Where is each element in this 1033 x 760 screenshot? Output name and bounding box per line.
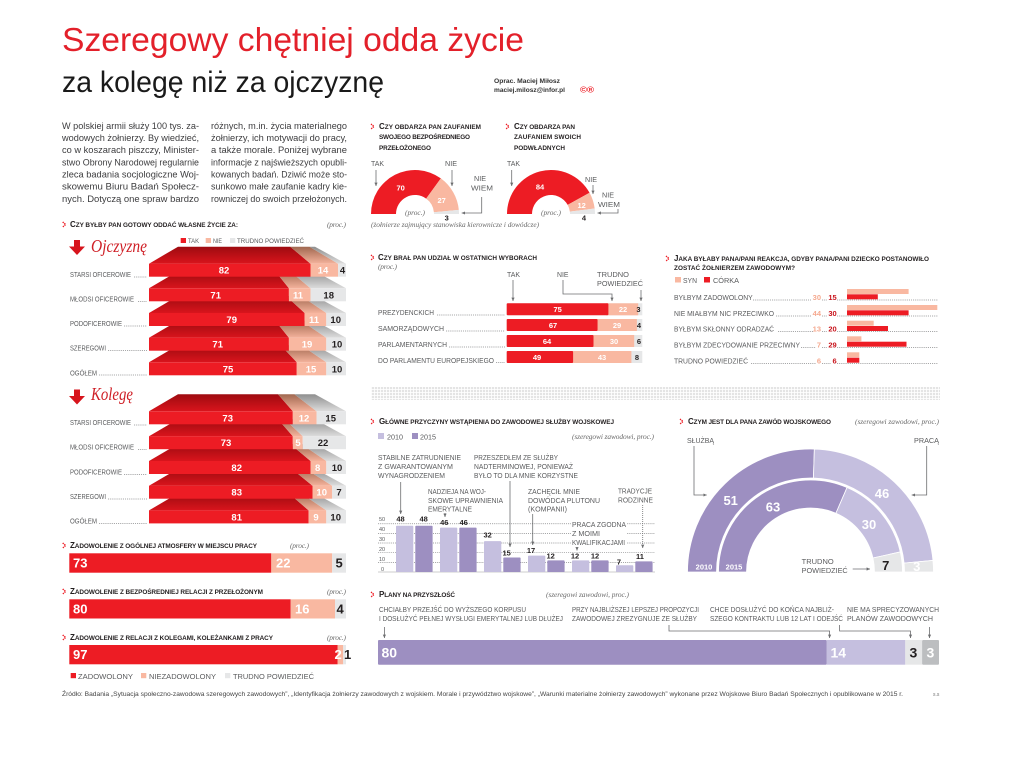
panel: satisfaction (63, 541, 351, 681)
values: 12 (591, 552, 599, 560)
values: 48 (420, 514, 428, 524)
chart: superior: (proc.) (327, 587, 347, 596)
annotations: plans: NIE MA SPRECYZOWANYCH (847, 607, 939, 614)
row: szeregowi: 83 (231, 488, 242, 499)
intro text (61, 121, 347, 205)
chart: reasons bars (378, 514, 655, 573)
chart: plans bar: 80 (382, 644, 397, 660)
annotations: plans: CHCIAŁBY PRZEJŚĆ DO WYŻSZEGO KORPUSU (379, 605, 526, 614)
chart: colleagues: ZADOWOLENIE Z RELACJI Z KOLEGAMI, KOLEŻANKAMI Z PRACY (70, 633, 274, 642)
axis labels: 30 (379, 537, 385, 543)
row: trudno: TRUDNO POWIEDZIEĆ (674, 356, 748, 366)
row: starsi oficerowie: 12 (299, 413, 309, 424)
row: podoficerowie: PODOFICEROWIE (70, 321, 122, 328)
row: parliamentary (378, 335, 642, 349)
values: 46 (460, 518, 468, 527)
row: local: 4 (637, 321, 642, 330)
row: szeregowi: 10 (316, 488, 327, 499)
intro text: nych. Dotyczą one spraw bardzo (62, 194, 199, 205)
heading: reasons: GŁÓWNE PRZYCZYNY WSTĄPIENIA DO ZAWODOWEJ SŁUŻBY WOJSKOWEJ (379, 417, 614, 426)
annotation: moved from extended service (474, 453, 578, 547)
annotations: plans: I DOSŁUŻYĆ PEŁNEJ WYSŁUGI EMERYTALNEJ LUB DŁUŻEJ (379, 614, 563, 623)
row: starsi oficerowie: 14 (318, 266, 329, 277)
chart: double semicircle: 7 (882, 558, 889, 573)
row: parliamentary: PARLAMENTARNYCH (378, 342, 447, 349)
row: ogółem: 10 (330, 512, 341, 523)
heading: willingness (63, 220, 347, 229)
intro text: skowemu Biuru Badań Społecz- (62, 182, 199, 192)
annotation: retirement rights: NADZIEJA NA WOJ- (428, 489, 487, 496)
label: pracą (912, 438, 939, 495)
row: odradzać: BYŁBYM SKŁONNY ODRADZAĆ (674, 324, 774, 334)
annotation: family tradition: TRADYCJE (618, 488, 652, 496)
heading: trust in subordinates (506, 122, 581, 152)
heading: elections: (proc.) (378, 262, 398, 271)
chart: Kolegę stacked bars (70, 394, 346, 526)
chart: double semicircle: 2010 (696, 562, 712, 572)
chart: plans bar: 3 (910, 644, 918, 660)
row: młodsi oficerowie: 22 (318, 438, 328, 449)
labels: superior: NIE (445, 161, 457, 168)
values: 12 (547, 552, 555, 560)
annotation: qualifications: Z MOIMI (572, 531, 600, 538)
heading: Kolegę: Kolegę (90, 384, 133, 404)
label: służbą (687, 436, 714, 495)
chart: atmosphere: (proc.) (290, 541, 310, 550)
row: parliamentary: 6 (637, 337, 641, 346)
row: european (378, 351, 642, 365)
row: trudno (674, 352, 938, 366)
labels: superior: WIEM (471, 186, 493, 192)
row: presidential (378, 303, 642, 317)
chart: atmosphere (63, 541, 346, 573)
panel: what military profession is (680, 417, 940, 575)
chart: atmosphere: 5 (336, 556, 343, 570)
axis labels: 10 (379, 557, 385, 563)
label: trudno powiedzieć (802, 559, 870, 575)
row: ogółem: OGÓŁEM (70, 368, 97, 378)
row: przeciwny (674, 336, 938, 350)
note: respondents: (żołnierze zajmujący stanowiska kierownicze i dowódcze) (371, 220, 540, 229)
row: podoficerowie: 10 (330, 315, 341, 326)
row: trudno: 6 (833, 356, 837, 366)
panel: elections (371, 253, 643, 365)
axis labels: 20 (379, 547, 385, 553)
chart: double semicircle (688, 449, 934, 574)
row: ogółem: 15 (306, 364, 317, 376)
intro text: co w koszarach piszczy, Minister- (62, 145, 199, 156)
row: presidential: 3 (636, 305, 641, 314)
panel: trust in subordinates (506, 122, 620, 222)
legend: tak nie trudno: TRUDNO POWIEDZIEĆ (237, 236, 304, 245)
labels: subordinates (507, 161, 620, 213)
row: podoficerowie (70, 296, 346, 328)
heading: willingness: (proc.) (327, 220, 347, 229)
label: pracą: PRACĄ (914, 438, 939, 445)
row: ogółem: 75 (223, 364, 234, 376)
label: trudno powiedzieć: TRUDNO (802, 559, 834, 566)
chart: Ojczyznę stacked bars (70, 247, 346, 378)
heading: plans (371, 590, 630, 599)
row: młodsi oficerowie: 18 (323, 290, 334, 301)
chart: plans bar: 14 (830, 644, 846, 660)
row: european: DO PARLAMENTU EUROPEJSKIEGO (378, 358, 495, 365)
legend: years: 2015 (420, 434, 436, 442)
labels: subordinates: NIE (585, 177, 597, 184)
row: european: 8 (635, 353, 639, 362)
title: Szeregowy chętniej odda życie (62, 21, 524, 58)
labels: superior: NIE (474, 176, 486, 183)
row: podoficerowie: 10 (332, 463, 342, 474)
annotation: moved from extended service: NADTERMINOWEJ, PONIEWAŻ (474, 462, 574, 471)
row: starsi oficerowie: 15 (325, 413, 337, 424)
labels: subordinates: TAK (507, 161, 520, 168)
row: local: SAMORZĄDOWYCH (378, 326, 444, 333)
row: szeregowi: 71 (212, 340, 224, 351)
row: presidential: PREZYDENCKICH (378, 310, 434, 317)
intro text: sunkowo małe zaufanie kadry kie- (211, 182, 347, 192)
row: szeregowi: SZEREGOWI (70, 346, 106, 352)
heading: plans: (szeregowi zawodowi, proc.) (546, 590, 630, 599)
annotations: plans: PRZY NAJBLIŻSZEJ LEPSZEJ PROPOZYCJI (572, 605, 699, 614)
labels: elections columns: TRUDNO (597, 272, 630, 279)
row: młodsi oficerowie (70, 271, 346, 304)
axis labels: 40 (379, 527, 385, 533)
labels: subordinates: WIEM (598, 202, 620, 209)
heading: Kolegę (69, 384, 133, 404)
row: starsi oficerowie: 73 (222, 413, 233, 424)
row: podoficerowie: 82 (231, 463, 242, 474)
row: starsi oficerowie: 4 (340, 266, 346, 277)
row: podoficerowie: 79 (226, 315, 237, 326)
legend: syn córka: CÓRKA (713, 276, 739, 285)
legend: satisfaction: ZADOWOLONY (78, 674, 133, 681)
chart: double semicircle: 63 (766, 500, 780, 514)
chart: colleagues: 1 (344, 647, 351, 662)
legend: tak nie trudno: TAK (188, 238, 200, 245)
title (62, 21, 524, 99)
row: trudno: 6 (817, 356, 821, 366)
legend: satisfaction: TRUDNO POWIEDZIEĆ (233, 672, 314, 681)
annotations: plans (379, 605, 939, 638)
row: podoficerowie: 11 (309, 315, 320, 326)
row: przeciwny: 7 (817, 340, 821, 350)
row: local: 67 (549, 321, 557, 330)
chart: double semicircle: 2015 (726, 562, 742, 572)
row: parliamentary: 30 (610, 337, 618, 346)
label: trudno powiedzieć: POWIEDZIEĆ (802, 566, 848, 575)
heading: trust in subordinates: CZY OBDARZA PAN (514, 122, 575, 131)
intro text: różnych, m.in. życia materialnego (211, 121, 347, 132)
values: 12 (571, 552, 579, 560)
annotation: retirement rights (428, 489, 503, 517)
intro text: kowanych badań. Dziwić może sto- (211, 170, 347, 180)
row: starsi oficerowie (70, 247, 346, 279)
heading: trust in superior: SWOJEGO BEZPOŚREDNIEGO (379, 132, 470, 141)
heading: profession: (szeregowi zawodowi, proc.) (855, 417, 940, 426)
legend: syn córka: SYN (683, 278, 697, 285)
heading: willingness: CZY BYŁBY PAN GOTOWY ODDAĆ WŁASNE ŻYCIE ZA: (70, 220, 238, 229)
row: starsi oficerowie (70, 394, 346, 427)
chart: colleagues (63, 633, 351, 664)
row: młodsi oficerowie: 11 (293, 290, 304, 301)
panel: willingness to give life (63, 220, 347, 526)
values: 32 (484, 530, 492, 540)
title: za kolegę niż za ojczyznę (62, 66, 384, 99)
values: 48 (396, 514, 405, 524)
intro text: stwo Obrony Narodowej regularnie (62, 158, 199, 168)
chart: atmosphere: 22 (276, 556, 290, 570)
row: szeregowi (70, 321, 346, 352)
intro text: rowniczej do swoich przełożonych. (211, 194, 347, 205)
row: ogółem: 81 (231, 512, 243, 523)
annotation: stable employment: Z GWARANTOWANYM (378, 464, 453, 471)
row: szeregowi (70, 469, 346, 501)
chart: elections bars (378, 303, 642, 365)
intro text: a także morale. Poniżej wybrane (211, 145, 347, 156)
annotations: plans: SZEGO KONTRAKTU LUB 12 LAT I ODEJŚĆ (710, 614, 843, 623)
row: european: 49 (533, 353, 541, 362)
row: starsi oficerowie: STARSI OFICEROWIE (70, 272, 131, 279)
heading: profession: CZYM JEST DLA PANA ZAWÓD WOJSKOWEGO (688, 417, 831, 426)
chart: superior: ZADOWOLENIE Z BEZPOŚREDNIEJ RELACJI Z PRZEŁOŻONYM (70, 587, 263, 596)
labels: elections columns: TAK (507, 272, 520, 279)
heading: trust in subordinates: PODWŁADNYCH (514, 145, 565, 152)
row: ogółem: 9 (313, 512, 319, 523)
values: 7 (617, 558, 621, 566)
legend: years: (szeregowi zawodowi, proc.) (572, 432, 655, 441)
intro text: informacje z najświeższych opubli- (211, 158, 347, 168)
annotation: qualifications (571, 520, 627, 550)
row: nie przeciwko: NIE MIAŁBYM NIC PRZECIWKO (674, 311, 775, 318)
row: szeregowi: SZEREGOWI (70, 494, 106, 501)
annotation: moved from extended service: PRZESZEDŁEM ZE SŁUŻBY (474, 453, 558, 462)
chart: colleagues: 2 (334, 647, 342, 662)
heading: plans: PLANY NA PRZYSZŁOŚĆ (379, 590, 455, 599)
chart: atmosphere: ZADOWOLENIE Z OGÓLNEJ ATMOSFERY W MIEJSCU PRACY (70, 541, 258, 550)
legend: years (378, 432, 655, 442)
heading: trust in superior: CZY OBDARZA PAN ZAUFANIEM (379, 122, 481, 131)
annotation: retirement rights: EMERYTALNE (428, 506, 472, 514)
heading: trust in superior: PRZEŁOŻONEGO (379, 143, 431, 152)
annotations: plans: ZAWODOWEJ ZREZYGNUJE ZE SŁUŻBY (572, 614, 697, 623)
row: przeciwny: 29 (828, 340, 837, 350)
chart: superior: 4 (336, 602, 344, 616)
chart: double semicircle: 30 (862, 517, 876, 532)
row: młodsi oficerowie: 5 (295, 438, 301, 449)
chart: semicircle superior: 27 (438, 196, 446, 205)
legend: tak nie trudno: NIE (213, 238, 222, 245)
row: młodsi oficerowie: MŁODSI OFICEROWIE (70, 296, 134, 304)
values: 17 (527, 546, 535, 555)
row: młodsi oficerowie (70, 419, 346, 452)
row: presidential: 75 (554, 305, 562, 314)
annotation: platoon commander: (KOMPANII) (528, 506, 567, 514)
chart: semicircle subordinates: 4 (582, 214, 587, 222)
panel: reasons for joining (371, 417, 655, 573)
chart: semicircle superior (371, 170, 459, 222)
annotation: qualifications: PRACA ZGODNA (572, 522, 626, 529)
chart: double semicircle: 51 (723, 493, 738, 508)
labels: elections columns: NIE (557, 272, 569, 279)
row: ogółem: OGÓŁEM (70, 516, 97, 526)
page mark: s.s (933, 692, 940, 698)
row: zadowolony: 30 (813, 293, 821, 302)
annotation: stable employment: STABILNE ZATRUDNIENIE (378, 455, 461, 462)
values (396, 514, 644, 566)
source note: Źródło: Badania „Sytuacja społeczno-zawodowa szeregowych zawodowych”, „Identyfikacja żołnierzy zawodowych z wojskiem. Morale i przywództwo wojskowe”, „Warunki materialne żołnierzy zawodowych” wykonane przez Wojskowe Biuro Badań Społecznych i opublikowane w 2015 r. (62, 691, 903, 698)
author credit: maciej.milosz@infor.pl (494, 87, 565, 94)
row: odradzać (674, 321, 938, 334)
row: młodsi oficerowie: MŁODSI OFICEROWIE (70, 444, 134, 452)
panel: child reaction (666, 254, 938, 366)
row: nie przeciwko: 30 (828, 309, 837, 318)
row: local (378, 319, 642, 333)
annotation: platoon commander: DOWÓDCA PLUTONU (528, 496, 600, 505)
intro text: żołnierzy, ich motywacji do pracy, (211, 133, 347, 144)
row: młodsi oficerowie: 73 (221, 438, 231, 449)
row: starsi oficerowie: 82 (219, 266, 229, 277)
annotation: family tradition (618, 488, 653, 548)
chart: plans bar (378, 640, 939, 665)
chart: superior (63, 587, 347, 618)
heading: Ojczyznę (69, 236, 147, 256)
legend: years: 2010 (387, 434, 403, 442)
row: szeregowi: 19 (302, 340, 312, 351)
axis labels: 50 (379, 517, 385, 523)
annotation: family tradition: RODZINNE (618, 498, 653, 504)
heading: child reaction (666, 254, 929, 272)
chart: semicircle superior: 70 (397, 184, 405, 192)
chart: semicircle subordinates: 12 (578, 201, 586, 210)
author credit (494, 78, 594, 94)
labels: subordinates: NIE (602, 192, 614, 200)
annotations: plans: PLANÓW ZAWODOWYCH (847, 614, 933, 623)
chart: semicircle superior: 3 (445, 214, 449, 222)
axis labels (379, 517, 385, 573)
row: nie przeciwko (674, 305, 938, 318)
panel: future plans (371, 590, 939, 665)
intro text: zleca badania socjologiczne Woj- (62, 170, 199, 180)
annotation: stable employment: WYNAGRODZENIEM (378, 473, 445, 480)
annotation: platoon commander: ZACHĘCIŁ MNIE (528, 489, 580, 496)
heading: trust in subordinates: ZAUFANIEM SWOICH (514, 134, 581, 141)
row: european: 43 (598, 353, 606, 362)
row: local: 29 (613, 321, 621, 330)
labels: superior (371, 161, 493, 213)
chart: semicircle subordinates: 84 (536, 182, 545, 192)
row: zadowolony (674, 289, 938, 302)
row: zadowolony: BYŁBYM ZADOWOLONY (674, 295, 753, 302)
row: nie przeciwko: 44 (813, 309, 822, 318)
values: 11 (636, 552, 644, 561)
row: ogółem (70, 493, 346, 526)
heading: elections (371, 253, 537, 271)
row: podoficerowie: 8 (315, 463, 320, 474)
heading: trust in superior (371, 122, 481, 152)
row: szeregowi: 10 (332, 340, 342, 351)
heading: child reaction: ZOSTAĆ ŻOŁNIERZEM ZAWODOWYM? (674, 263, 795, 272)
axis labels: 0 (381, 567, 384, 573)
chart: superior: 16 (295, 602, 309, 616)
chart: semicircle subordinates (507, 170, 595, 222)
row: ogółem (70, 345, 346, 378)
annotations: plans: CHCE DOSŁUŻYĆ DO KOŃCA NAJBLIŻ- (710, 605, 835, 614)
legend: satisfaction (71, 672, 314, 681)
heading: elections: CZY BRAŁ PAN UDZIAŁ W OSTATNICH WYBORACH (378, 253, 537, 262)
author credit: Oprac. Maciej Miłosz (494, 78, 561, 85)
labels: elections columns: POWIEDZIEĆ (597, 279, 643, 288)
chart: double semicircle: 3 (913, 559, 920, 574)
heading: profession (680, 417, 940, 426)
heading: child reaction: JAKA BYŁABY PANA/PANI REAKCJA, GDYBY PANA/PANI DZIECKO POSTANOWIŁO (674, 254, 929, 263)
row: młodsi oficerowie: 71 (210, 290, 222, 301)
chart: semicircle superior: (proc.) (405, 208, 426, 217)
labels: elections columns (507, 272, 643, 301)
values: 15 (503, 548, 511, 558)
heading: Ojczyznę: Ojczyznę (91, 236, 147, 256)
row: podoficerowie (70, 444, 346, 476)
intro text: wodowych żołnierzy. By wiedzieć, (61, 133, 199, 144)
row: parliamentary: 64 (543, 337, 552, 346)
chart: semicircle subordinates: (proc.) (541, 208, 562, 217)
chart: colleagues: (proc.) (327, 633, 347, 642)
chart: superior: 80 (73, 602, 87, 616)
row: starsi oficerowie: STARSI OFICEROWIE (70, 420, 131, 427)
chart: plans bar: 3 (926, 644, 934, 660)
row: podoficerowie: PODOFICEROWIE (70, 470, 122, 476)
author credit: ©® (580, 86, 594, 94)
row: zadowolony: 15 (828, 293, 837, 302)
intro text: W polskiej armii służy 100 tys. za- (62, 121, 199, 132)
annotation: platoon commander (528, 489, 600, 545)
row: odradzać: 13 (813, 324, 821, 334)
annotation: retirement rights: SKOWE UPRAWNIENIA (428, 498, 503, 505)
row: szeregowi: 7 (336, 488, 342, 499)
bars (396, 526, 653, 572)
label: służbą: SŁUŻBĄ (687, 436, 714, 445)
legend: syn córka (675, 276, 739, 285)
chart: colleagues: 97 (73, 647, 87, 662)
annotation: stable employment (378, 455, 461, 514)
chart: atmosphere: 73 (73, 556, 87, 570)
legend: tak nie trudno (181, 236, 304, 245)
chart: double semicircle: 46 (875, 486, 889, 501)
values: 46 (440, 518, 448, 527)
row: odradzać: 20 (828, 324, 837, 334)
row: ogółem: 10 (332, 364, 342, 376)
panel: trust in superior (371, 122, 493, 222)
annotation: moved from extended service: BYŁO TO DLA MNIE KORZYSTNE (474, 473, 578, 480)
annotation: qualifications: KWALIFIKACJAMI (572, 540, 625, 547)
labels: superior: TAK (371, 161, 384, 168)
legend: satisfaction: NIEZADOWOLONY (149, 674, 216, 681)
row: presidential: 22 (619, 305, 627, 314)
row: przeciwny: BYŁBYM ZDECYDOWANIE PRZECIWNY (674, 342, 800, 350)
